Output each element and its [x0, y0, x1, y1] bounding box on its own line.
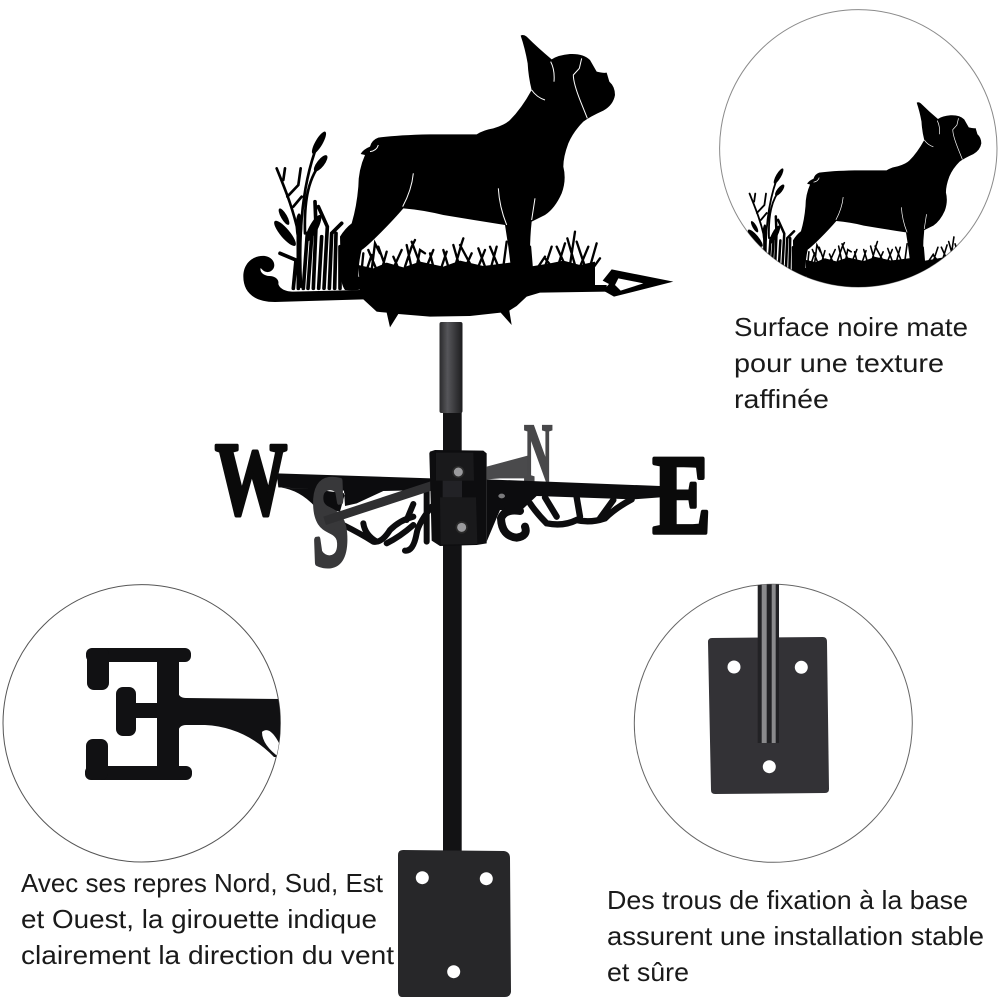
letter N: N: [524, 408, 552, 499]
arrowhead: [603, 269, 673, 297]
grass strip, rail, scroll and mound: [243, 256, 607, 327]
letter S: S: [309, 449, 350, 594]
reed heads and leaves: [271, 130, 330, 249]
east arm hole: [498, 494, 505, 498]
text: matte surface: [734, 312, 968, 414]
letter W: W: [215, 424, 287, 537]
clamp highlights: [436, 453, 477, 545]
south arm: [323, 481, 433, 525]
north arm: [487, 455, 530, 479]
pole in clamp: [443, 481, 462, 497]
dog contour cuts: [370, 58, 587, 225]
grass blades: [362, 232, 600, 270]
text: compass directions: et Ouest, la girouette indique: [21, 904, 377, 934]
text: fixing holes: Des trous de fixation à la base: [607, 885, 968, 915]
west arm: [277, 473, 432, 512]
text: compass directions: clairement la direction du vent: [21, 940, 395, 970]
pole: upper sleeve and lower rod: [440, 322, 462, 855]
screw upper: [453, 467, 464, 477]
text: compass directions: Avec ses repres Nord, Sud, Est: [21, 868, 384, 898]
mounting plate with three holes: [398, 850, 511, 997]
text: matte surface: pour une texture: [734, 348, 944, 378]
east arm: [487, 479, 660, 542]
panel: letter E detail circle: [3, 585, 280, 862]
text: compass directions: [21, 868, 395, 970]
panel: matte surface detail circle: [720, 10, 1000, 303]
weather vane top: French bulldog silhouette on grass with arrow: [243, 35, 673, 327]
east arm ornaments: [530, 497, 632, 524]
screw lower: [456, 522, 467, 533]
reeds and dense leaves: [277, 137, 323, 287]
text: fixing holes: assurent une installation stable: [607, 921, 984, 951]
text: matte surface: raffinée: [734, 384, 829, 414]
dog silhouette: [340, 35, 615, 292]
text: fixing holes: et sûre: [607, 957, 689, 987]
west arm ornaments: [343, 490, 432, 551]
letter E: E: [653, 432, 711, 557]
compass arms with W, N, S, E letters: [215, 408, 711, 594]
clamp body: [429, 450, 487, 546]
panel: mounting base detail circle: [634, 584, 912, 862]
text: fixing holes: [607, 885, 984, 987]
text: matte surface: Surface noire mate: [734, 312, 968, 342]
